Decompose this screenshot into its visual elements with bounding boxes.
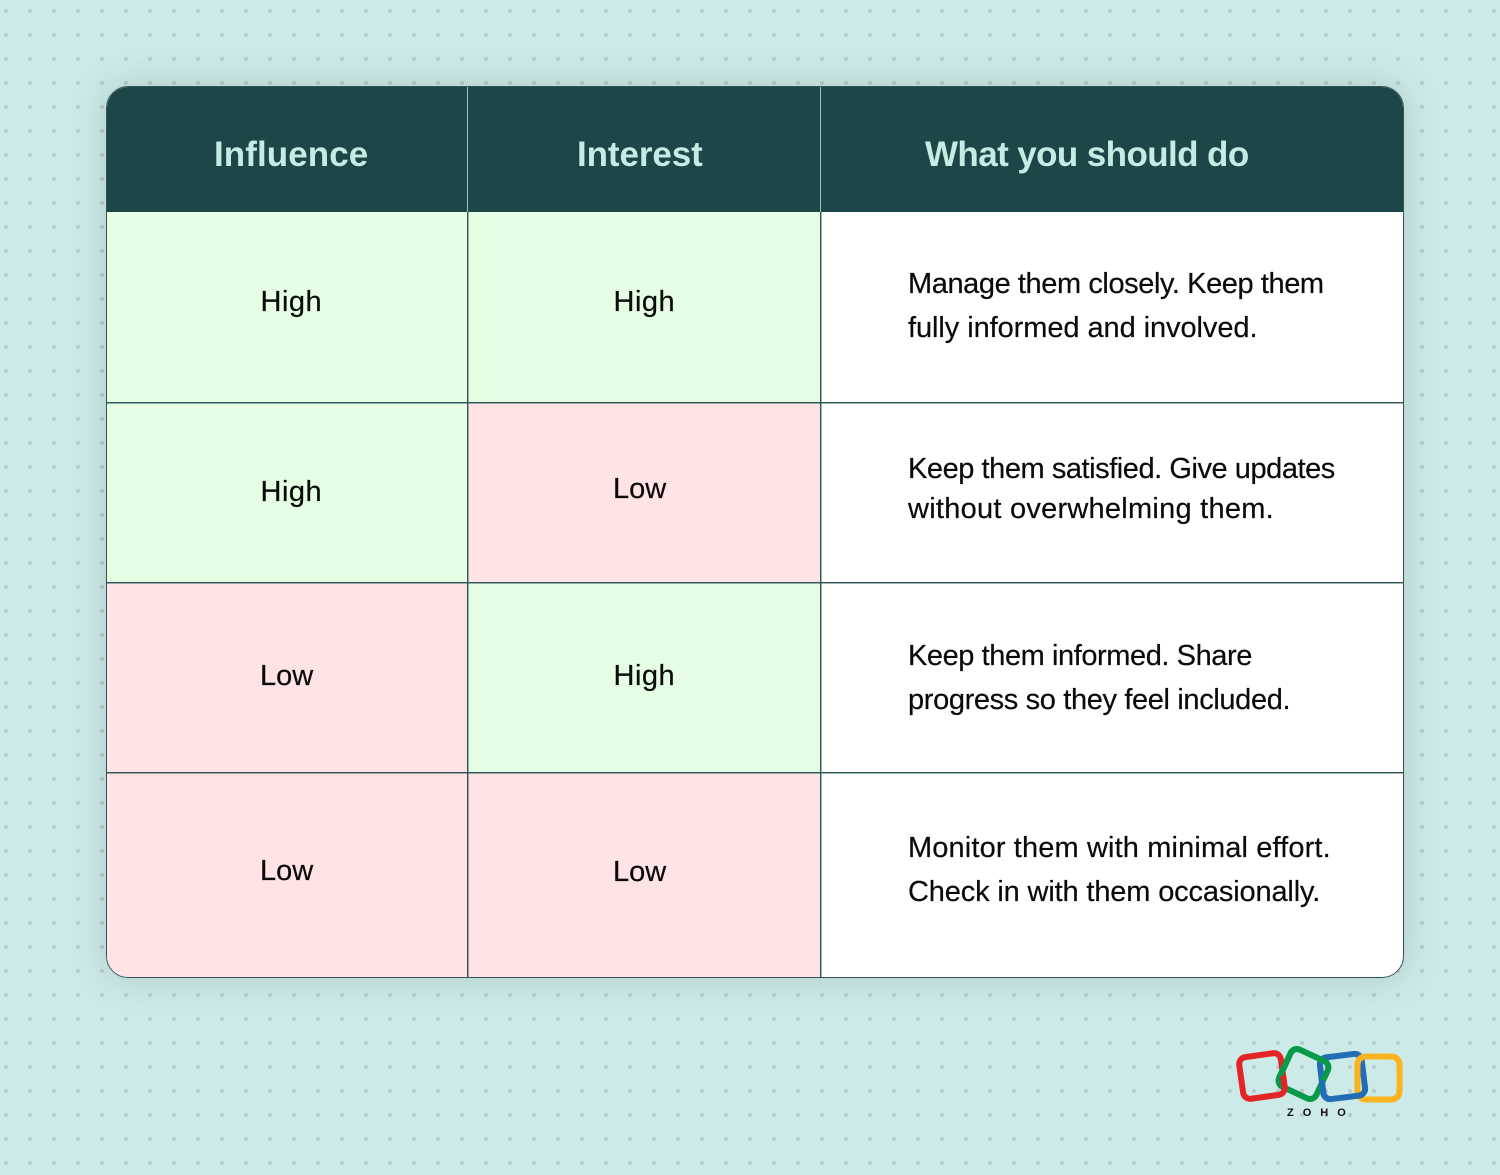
- row 2 influence cell: [107, 402, 467, 582]
- header row: [107, 87, 1405, 212]
- row 4 interest cell: [467, 772, 820, 977]
- row 3 interest cell: [467, 582, 820, 772]
- heading: Influence: Influence: [214, 135, 368, 174]
- row 2 action text: Keep them satisfied. Give updates: [908, 453, 1335, 485]
- heading: Interest: Interest: [577, 135, 703, 174]
- row 2 action text: [908, 453, 1335, 525]
- row 2 action text: without overwhelming them.: [908, 493, 1274, 525]
- row 3 action text: Keep them informed. Share: [908, 640, 1252, 672]
- row 2 interest cell: [467, 402, 820, 582]
- row 3 influence cell: Low: [260, 660, 313, 692]
- row 3 influence cell: [107, 582, 467, 772]
- row 1 action text: fully informed and involved.: [908, 312, 1257, 344]
- row 2 influence cell: High: [260, 476, 322, 508]
- row 4 action text: Check in with them occasionally.: [908, 876, 1320, 908]
- row 1 action text: Manage them closely. Keep them: [908, 268, 1324, 300]
- row 4 influence cell: [107, 772, 467, 977]
- icon: Zoho logo: [1236, 1046, 1402, 1119]
- row 3 action text: progress so they feel included.: [908, 684, 1290, 716]
- row 4 influence cell: Low: [260, 855, 313, 887]
- row 1 interest cell: [467, 212, 820, 402]
- panel: stakeholder table: [106, 86, 1404, 978]
- row 1 influence cell: [107, 212, 467, 402]
- row 3 interest cell: High: [614, 660, 675, 692]
- icon: Zoho logo: ZOHO: [1287, 1107, 1355, 1119]
- heading: What you should do: What you should do: [925, 135, 1249, 174]
- row 4 interest cell: Low: [613, 856, 666, 888]
- row 4 action text: Monitor them with minimal effort.: [908, 832, 1331, 864]
- row 1 interest cell: High: [614, 286, 675, 318]
- row 1 action text: [908, 268, 1324, 344]
- row 3 action text: [908, 640, 1290, 716]
- row 4 action text: [908, 832, 1331, 908]
- row 2 interest cell: Low: [613, 473, 666, 505]
- row 1 influence cell: High: [260, 286, 322, 318]
